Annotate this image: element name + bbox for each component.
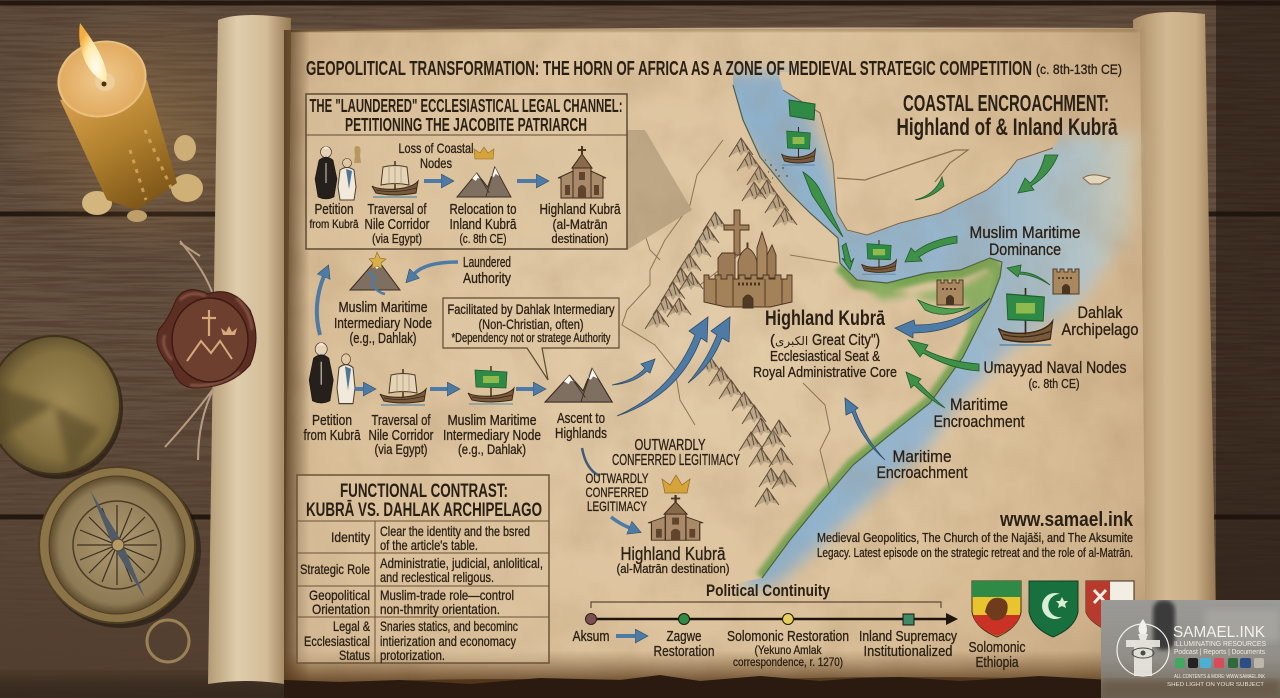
label: traversal: Nile Corridor — [364, 216, 430, 233]
node: Inland Supremacy: Inland Supremacy — [859, 628, 957, 645]
label: relocation — [450, 201, 517, 246]
logo wordmark: ILLUMINATING RESOURCES — [1174, 641, 1266, 648]
node: Solomonic: correspondence, r. 1270) — [733, 655, 843, 669]
icon: big ship dahlak — [998, 288, 1053, 345]
source note: Medieval Geopolitics, The Church of the Najāši, and The Aksumite — [817, 530, 1133, 545]
row: legal and ecclesiastical status: intierization and economacy — [380, 633, 516, 649]
row: identity: Identity — [331, 529, 370, 545]
fold shadow — [627, 130, 692, 250]
arrows: green naval movement — [803, 155, 1058, 408]
icon: castle east — [1053, 269, 1079, 294]
label: intermediary node: (e.g., Dahlak) — [350, 330, 416, 347]
icon: green ship — [468, 366, 514, 404]
label: outwardly conferred legitimacy — [612, 437, 740, 469]
arrow — [424, 179, 442, 183]
logo footer — [1167, 674, 1265, 688]
label: (al-Matrān destination) — [616, 561, 730, 576]
flow: petition route — [304, 343, 612, 457]
panel: samael.ink logo — [1101, 600, 1280, 698]
row: identity — [331, 523, 530, 553]
map labels — [876, 223, 1138, 482]
label: traversal: Traversal of — [368, 201, 427, 218]
panel heading: THE "LAUNDERED" ECCLESIASTICAL LEGAL CHANNEL: — [310, 96, 622, 116]
icon: crown — [474, 147, 494, 159]
Arabian land — [778, 72, 1062, 235]
label: petition: Petition — [312, 412, 352, 429]
row: strategic role: Strategic Role — [300, 561, 370, 577]
row: legal and ecclesiastical status: Ecclesiastical — [304, 633, 370, 649]
label: ascent: Highlands — [555, 425, 607, 442]
icon: second petitioner — [337, 354, 355, 404]
icon: mountains — [457, 167, 511, 197]
label: umayyad naval nodes: Umayyad Naval Nodes — [984, 358, 1126, 377]
African land — [600, 70, 1002, 610]
label: muslim maritime dominance — [970, 223, 1080, 259]
Yemen ridge line — [837, 150, 968, 182]
reef dots — [765, 160, 788, 178]
label: intermediary: Intermediary Node — [443, 427, 541, 444]
label: highland kubra: destination) — [552, 231, 608, 246]
icon: ship north — [781, 127, 816, 165]
row: identity: of the article's table. — [380, 537, 478, 553]
label: intermediary node: Intermediary Node — [334, 315, 432, 332]
label: Solomonic Ethiopia — [968, 639, 1026, 671]
row: legal and ecclesiastical status: protorization. — [380, 647, 445, 663]
shield: red and white — [1086, 581, 1134, 632]
row: strategic role — [300, 555, 543, 585]
label: dahlak archipelago: Dahlak — [1078, 303, 1123, 322]
label: traversal: Nile Corridor — [368, 427, 434, 444]
label: highland kubra core — [753, 307, 897, 381]
logo wordmark — [1173, 624, 1266, 656]
label: petition: from Kubrā — [310, 217, 359, 231]
label: highland kubra: (al-Matrān — [552, 216, 608, 232]
label: outwardly conferred legitimacy: OUTWARDLY — [634, 437, 706, 454]
label: umayyad naval nodes — [984, 358, 1126, 391]
icon: ship — [380, 369, 426, 405]
shields — [968, 581, 1134, 671]
candle — [50, 23, 203, 222]
highland borders — [622, 140, 838, 490]
callout: facilitated by Dahlak: *Dependency not or stratege Authority — [452, 331, 611, 345]
wax seal with strings — [157, 241, 256, 460]
label: loss of coastal nodes: Loss of Coastal — [398, 140, 474, 156]
label: relocation: Relocation to — [450, 201, 516, 218]
label: relocation: Inland Kubrā — [450, 216, 517, 233]
label: laundered authority — [463, 254, 511, 287]
table heading — [306, 481, 542, 521]
node: Zagwe — [654, 614, 714, 660]
arrow — [616, 634, 636, 638]
label: traversal — [364, 201, 430, 246]
title: (c. 8th-13th CE) — [1036, 61, 1122, 77]
row: legal and ecclesiastical status — [304, 618, 518, 663]
arrow — [430, 387, 448, 391]
label: highland kubra core: Ecclesiastical Seat & — [770, 348, 880, 365]
label: dahlak archipelago: Archipelago — [1062, 320, 1138, 339]
label: highland kubra core: Great City") — [812, 332, 880, 349]
row: identity: Clear the identity and the bsred — [380, 523, 530, 539]
node: laundered authority — [334, 252, 511, 347]
mountain range — [645, 138, 797, 507]
label: intermediary node — [334, 299, 432, 347]
label: outwardly conferred legitimacy small: CONFERRED — [586, 484, 648, 500]
shield: crescent — [1029, 581, 1078, 637]
row: legal and ecclesiastical status: Legal & — [333, 618, 371, 634]
source note — [817, 509, 1134, 560]
arrow: upward from petition to channel — [317, 276, 324, 335]
map heading: coastal encroachment: Highland of & Inland Kubrā — [896, 114, 1118, 141]
label: petition: Petition — [314, 201, 354, 218]
icon: church — [648, 495, 703, 540]
node: Inland Supremacy: Institutionalized — [864, 643, 952, 660]
icons: map fleet and forts — [781, 100, 1079, 345]
green coastal strip — [762, 260, 1000, 578]
label: outwardly conferred legitimacy: CONFERRED LEGITIMACY — [612, 452, 740, 469]
row: geopolitical orientation: Geopolitical — [309, 587, 370, 603]
label: highland kubra — [540, 201, 621, 246]
label: maritime encroachment lower: Encroachment — [876, 463, 968, 482]
panel: laundered ecclesiastical legal channel — [306, 94, 627, 249]
label: Highland Kubrā — [620, 544, 726, 564]
sea — [718, 72, 1138, 590]
node: Aksum: Aksum — [572, 628, 610, 645]
main parchment — [284, 28, 1146, 684]
label: traversal: (via Egypt) — [374, 441, 428, 457]
node: Solomonic: (Yekuno Amlak — [754, 643, 822, 657]
icon: ship on Nile — [372, 161, 418, 197]
arrows: blue maritime movement — [845, 298, 990, 460]
timeline: political continuity — [572, 581, 958, 669]
node: Solomonic — [727, 614, 849, 669]
label: intermediary: (e.g., Dahlak) — [458, 441, 526, 457]
row: geopolitical orientation: Orientation — [312, 601, 370, 617]
arrow — [355, 387, 364, 391]
label: ascent: Ascent to — [557, 410, 605, 427]
label: umayyad naval nodes: (c. 8th CE) — [1028, 376, 1080, 391]
source note: www.samael.ink — [999, 509, 1134, 531]
callout: facilitated by Dahlak — [443, 298, 619, 380]
label: muslim maritime dominance: Muslim Maritime — [970, 223, 1080, 242]
icon: central cathedral — [704, 210, 792, 308]
node: Zagwe: Zagwe — [666, 628, 702, 645]
row: legal and ecclesiastical status: Status — [339, 647, 370, 663]
label: traversal: (via Egypt) — [372, 231, 422, 246]
label: traversal: Traversal of — [372, 412, 431, 429]
table heading: FUNCTIONAL CONTRAST: — [340, 481, 508, 502]
right scroll roll — [1133, 12, 1217, 682]
arrow — [517, 179, 537, 183]
label: laundered authority: Laundered — [463, 254, 511, 271]
label: petition: from Kubrā — [304, 427, 361, 444]
node: Solomonic: Solomonic Restoration — [727, 628, 849, 645]
row: geopolitical orientation: non-thmrity orientation. — [380, 601, 500, 617]
coast lines — [733, 85, 1002, 578]
row: strategic role: and reclestical religous. — [380, 569, 494, 585]
callout: facilitated by Dahlak: Facilitated by Dahlak Intermediary — [448, 302, 615, 317]
row: legal and ecclesiastical status: Snaries statics, and becominc — [380, 618, 518, 634]
label: highland kubra core: ( — [770, 332, 775, 349]
timeline heading: Political Continuity — [706, 581, 830, 600]
icon: mountain with star — [350, 252, 400, 294]
map heading: coastal encroachment: COASTAL ENCROACHMENT: — [903, 90, 1109, 116]
label: outwardly conferred legitimacy small: LEGITIMACY — [587, 498, 647, 514]
label: petition — [310, 201, 359, 231]
icon: petitioner — [309, 343, 333, 403]
icon: church — [558, 146, 606, 198]
paper texture — [284, 28, 1146, 698]
icon: crown — [662, 475, 690, 493]
logo wordmark: Podcast | Reports | Documents — [1174, 649, 1265, 656]
platform icons — [1175, 658, 1264, 668]
node: Inland Supremacy — [859, 614, 957, 660]
source note: Legacy. Latest episode on the strategic retreat and the role of al-Matrān. — [817, 545, 1133, 560]
node: Zagwe: Restoration — [654, 643, 714, 660]
label: Solomonic Ethiopia: Ethiopia — [976, 654, 1019, 671]
logo wordmark: SAMAEL.INK — [1173, 624, 1265, 641]
label: maritime encroachment upper — [934, 395, 1025, 431]
row: strategic role: Administratie, judicial, anlolitical, — [380, 555, 543, 571]
icon: petitioners — [315, 146, 361, 200]
label: dahlak archipelago — [1062, 303, 1138, 339]
node: Aksum — [572, 614, 610, 645]
arrow — [516, 387, 534, 391]
label: maritime encroachment upper: Maritime — [950, 395, 1008, 414]
label: intermediary: Muslim Maritime — [448, 412, 536, 429]
label: highland kubra core: Royal Administrative Core — [753, 364, 897, 381]
icon: flag north — [789, 100, 815, 120]
panel: functional contrast table — [297, 475, 549, 663]
label: relocation: (c. 8th CE) — [460, 231, 506, 246]
node: highland kubra destination — [616, 475, 730, 576]
label: maritime encroachment lower — [876, 447, 968, 482]
label — [616, 544, 730, 576]
left scroll roll — [208, 15, 291, 684]
logo emblem — [1117, 619, 1169, 676]
panel heading: PETITIONING THE JACOBITE PATRIARCH — [345, 115, 587, 135]
map of the Horn of Africa — [600, 70, 1138, 610]
label: laundered authority: Authority — [463, 270, 511, 287]
icon: mountains — [545, 368, 612, 402]
compass lid — [0, 336, 123, 479]
shield: Solomonic Ethiopia — [972, 581, 1021, 637]
Arabian coast — [783, 90, 1053, 235]
logo footer: SHED LIGHT ON YOUR SUBJECT — [1167, 682, 1265, 688]
compass — [39, 467, 201, 662]
row: geopolitical orientation — [309, 587, 514, 617]
icon: castle mainland — [937, 280, 963, 305]
label: highland kubra: Highland Kubrā — [540, 201, 621, 218]
label: ascent — [555, 410, 607, 442]
panel heading — [310, 96, 622, 135]
islands and reefs — [1083, 175, 1110, 184]
label: intermediary — [443, 412, 541, 457]
arrow to mountain — [414, 262, 458, 274]
table heading: KUBRĀ VS. DAHLAK ARCHIPELAGO — [306, 500, 542, 521]
label: maritime encroachment lower: Maritime — [892, 447, 952, 466]
label: maritime encroachment upper: Encroachment — [934, 412, 1025, 431]
label: Solomonic Ethiopia: Solomonic — [968, 639, 1026, 656]
map heading: coastal encroachment — [896, 90, 1118, 141]
label: loss of coastal nodes — [398, 140, 474, 171]
label: highland kubra core: Highland Kubrā — [765, 307, 885, 330]
callout: facilitated by Dahlak: (Non-Christian, often) — [478, 317, 584, 332]
label: petition — [304, 412, 361, 444]
label: loss of coastal nodes: Nodes — [420, 155, 452, 171]
label: highland kubra core: الكبرى — [775, 334, 808, 349]
arrows: ascent towards highland — [582, 317, 730, 476]
label: traversal — [368, 412, 434, 457]
label: muslim maritime dominance: Dominance — [989, 240, 1061, 259]
icon: ship gulf — [862, 240, 896, 274]
label: outwardly conferred legitimacy small: OUTWARDLY — [586, 470, 649, 486]
row: geopolitical orientation: Muslim-trade role—control — [380, 587, 514, 603]
arrow: to highland church — [611, 517, 630, 528]
label: intermediary node: Muslim Maritime — [338, 299, 428, 316]
label: outwardly conferred legitimacy small — [586, 470, 649, 514]
